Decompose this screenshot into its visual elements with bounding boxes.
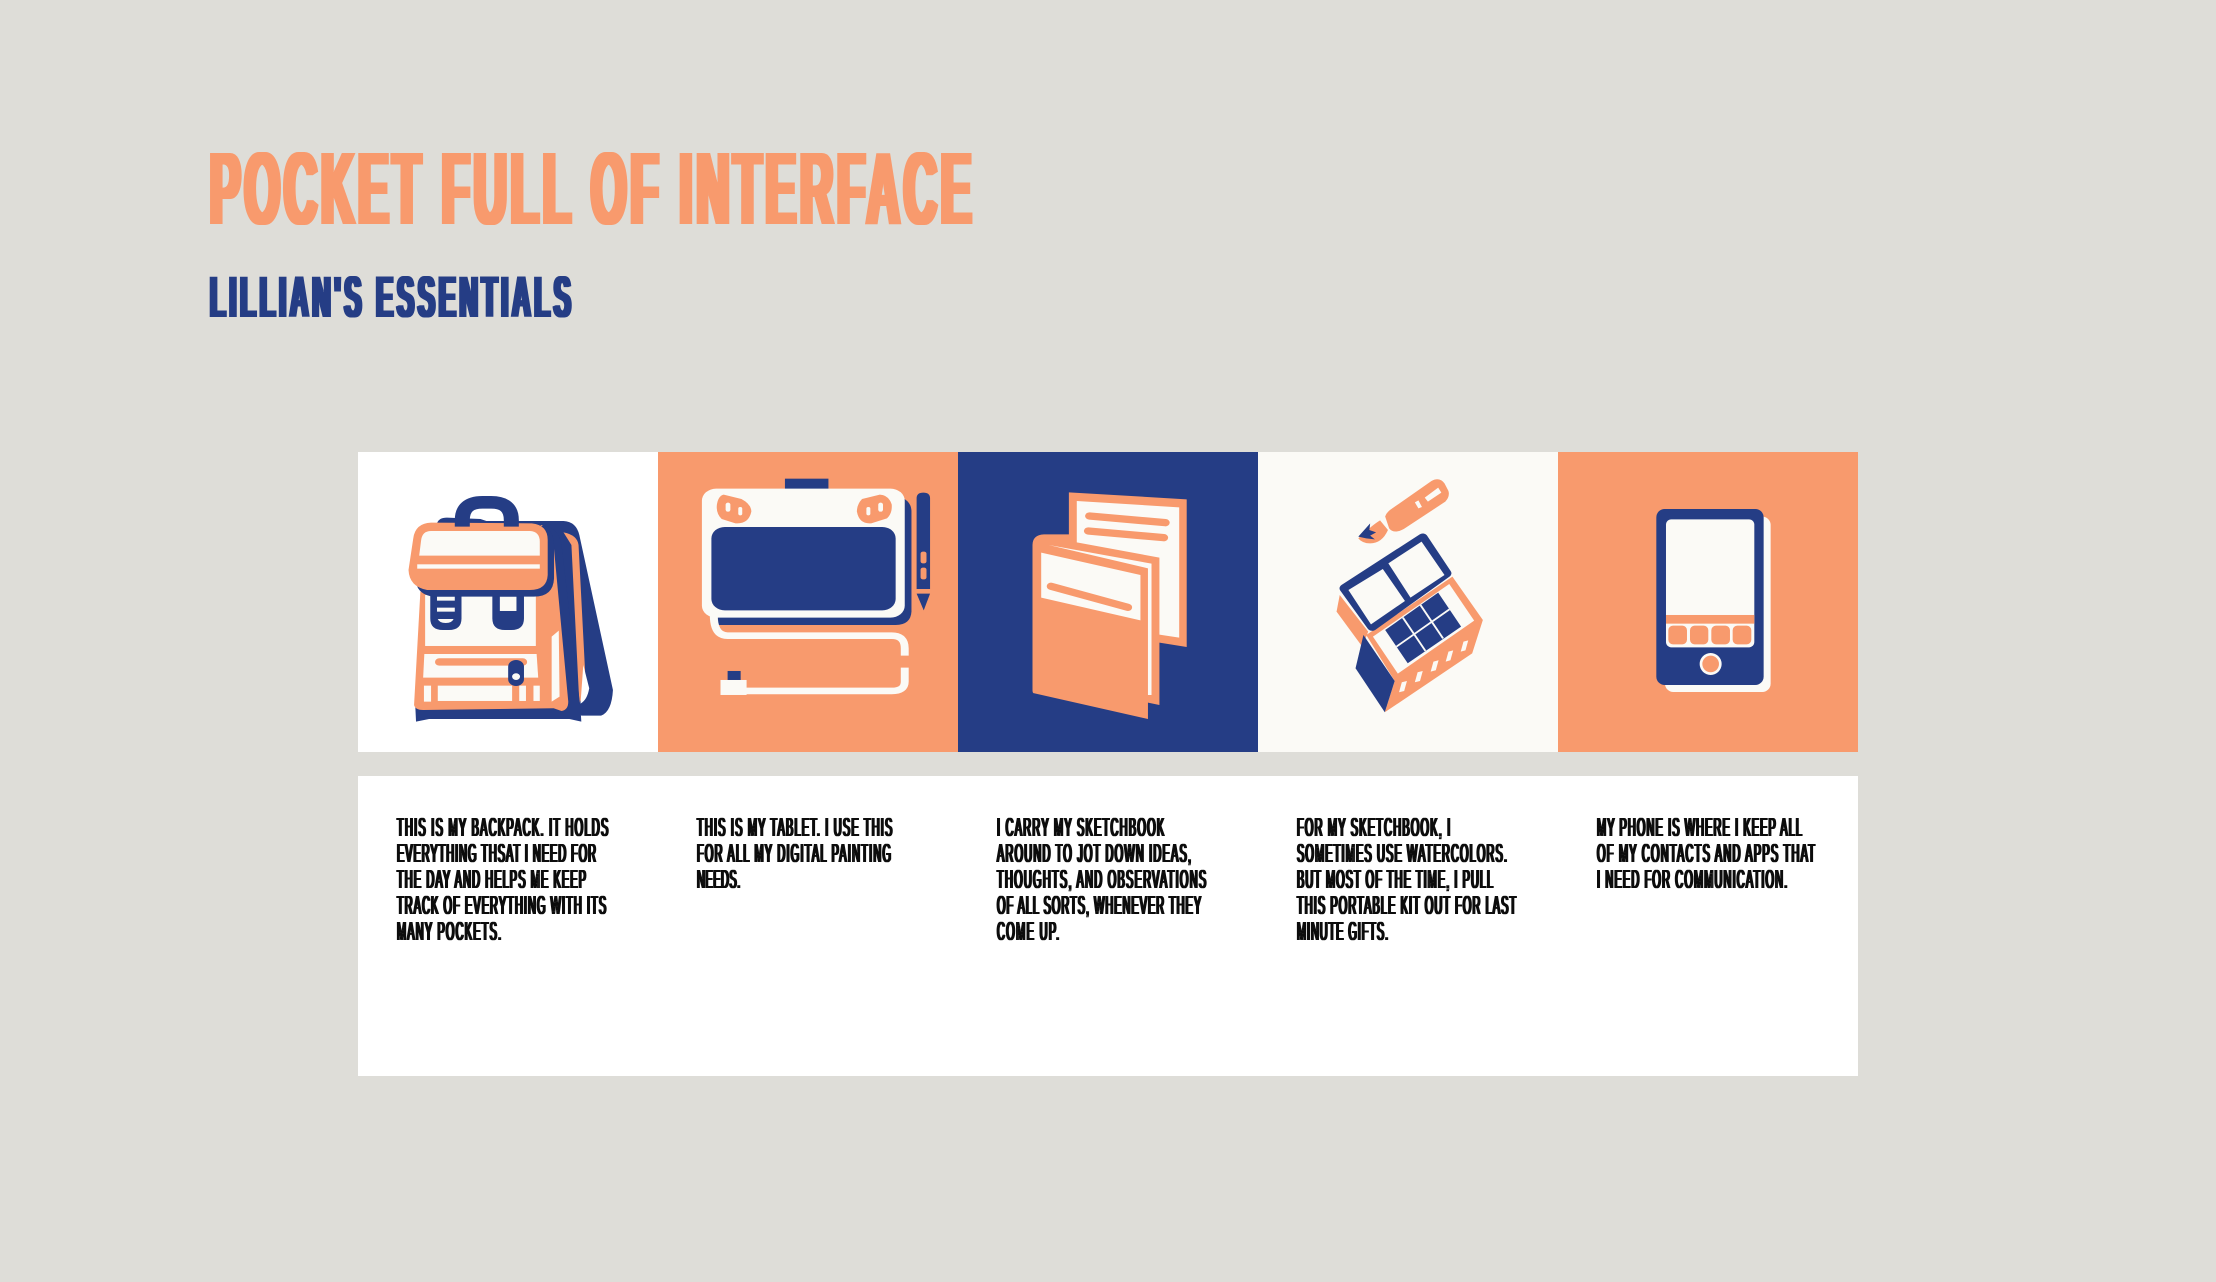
text block: watercolor caption: BUT MOST OF THE TIME, I PULL [1297, 866, 1493, 895]
text block: phone caption: I NEED FOR COMMUNICATION. [1597, 866, 1787, 895]
text block: tablet caption [697, 814, 892, 895]
text block: backpack caption: TRACK OF EVERYTHING WITH ITS [397, 892, 606, 921]
text block: backpack caption: MANY POCKETS. [397, 918, 501, 947]
text block: watercolor caption: MINUTE GIFTS. [1297, 918, 1388, 947]
text block: phone caption [1597, 814, 1815, 895]
panel: sketchbook tile [958, 452, 1258, 752]
text block: sketchbook caption: I CARRY MY SKETCHBOOK [997, 814, 1165, 843]
text block: sketchbook caption: OF ALL SORTS, WHENEVER THEY [997, 892, 1201, 921]
subtitle: LILLIAN'S ESSENTIALS [210, 265, 571, 330]
text block: tablet caption: NEEDS. [697, 866, 740, 895]
text block: sketchbook caption [997, 814, 1206, 947]
panel: phone tile [1558, 452, 1858, 752]
text block: tablet caption: FOR ALL MY DIGITAL PAINTING [697, 840, 891, 869]
text block: phone caption: MY PHONE IS WHERE I KEEP ALL [1597, 814, 1802, 843]
text block: sketchbook caption: COME UP. [997, 918, 1059, 947]
icon: drawing tablet [702, 479, 930, 695]
panel: captions background [358, 776, 1858, 1076]
text block: backpack caption: EVERYTHING THSAT I NEED FOR [397, 840, 596, 869]
text block: watercolor caption: THIS PORTABLE KIT OUT FOR LAST [1297, 892, 1516, 921]
text block: tablet caption: THIS IS MY TABLET. I USE THIS [697, 814, 892, 843]
text block: backpack caption: THIS IS MY BACKPACK. IT HOLDS [397, 814, 608, 843]
title: POCKET FULL OF INTERFACE [210, 131, 971, 246]
text block: watercolor caption: FOR MY SKETCHBOOK, I [1297, 814, 1450, 843]
icon: phone [1656, 509, 1771, 692]
icon: watercolor kit and brush [1337, 479, 1483, 712]
text block: backpack caption [397, 814, 608, 947]
text block: phone caption: OF MY CONTACTS AND APPS THAT [1597, 840, 1815, 869]
panel: watercolor tile [1258, 452, 1558, 752]
text block: backpack caption: THE DAY AND HELPS ME KEEP [397, 866, 586, 895]
text block: watercolor caption [1297, 814, 1516, 947]
icon: sketchbook [1032, 492, 1187, 719]
icon: backpack [409, 502, 613, 722]
panel: tablet tile [658, 452, 958, 752]
panel: backpack tile [358, 452, 658, 752]
text block: watercolor caption: SOMETIMES USE WATERCOLORS. [1297, 840, 1507, 869]
text block: sketchbook caption: THOUGHTS, AND OBSERVATIONS [997, 866, 1206, 895]
text block: sketchbook caption: AROUND TO JOT DOWN IDEAS, [997, 840, 1191, 869]
